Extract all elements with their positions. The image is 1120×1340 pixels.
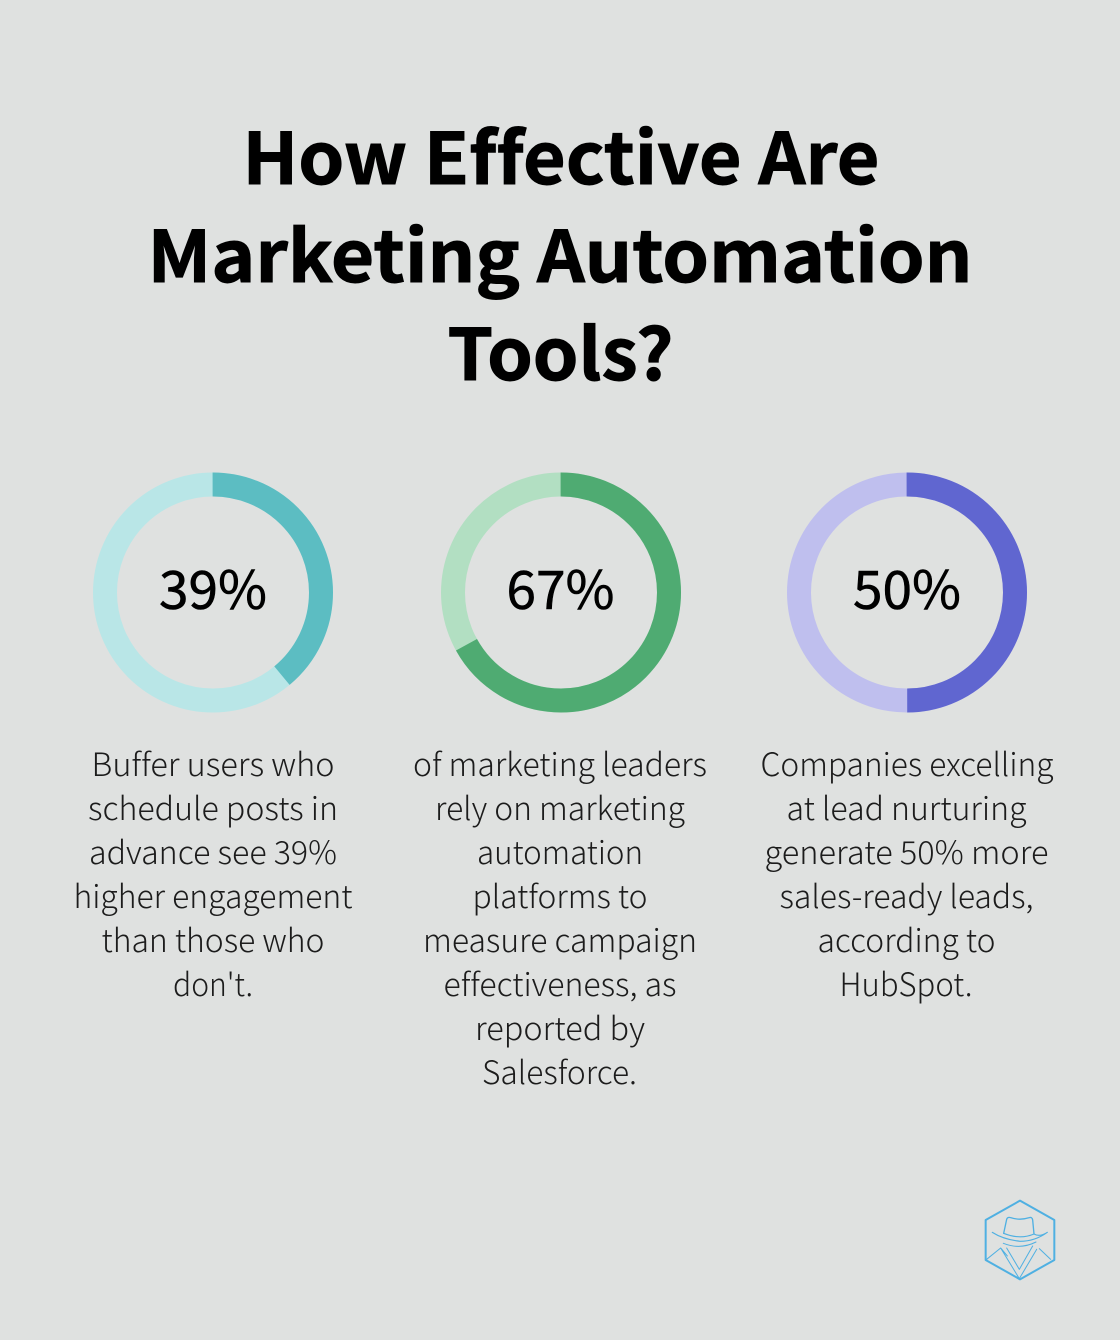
description: Salesforce: platforms to [472,872,648,918]
description: Buffer: than those who [102,916,324,962]
description: Salesforce: reported by [475,1004,645,1050]
donut chart: 39% [105,484,321,700]
description: Buffer: don't. [173,960,253,1006]
description: Buffer: higher engagement [74,872,352,918]
description: Salesforce: Salesforce. [482,1048,637,1094]
description: Buffer [74,740,352,1006]
description: Salesforce [413,740,707,1094]
description: Buffer: Buffer users who [92,740,334,786]
panel: 50% stat [760,484,1054,1006]
title [148,103,973,401]
description: HubSpot: sales-ready leads, [780,872,1034,918]
description: HubSpot: at lead nurturing [786,784,1026,830]
description: Salesforce: of marketing leaders [413,740,707,786]
panel: 39% stat [74,484,352,1006]
value: 39%: 39% [159,549,267,625]
panel: 67% stat [413,484,707,1094]
value: 67%: 67% [506,549,614,625]
donut chart: 50% [799,484,1015,700]
description: Buffer: advance see 39% [89,828,337,874]
description: Salesforce: rely on marketing [435,784,685,830]
description: HubSpot [760,740,1054,1006]
title: Tools? [448,299,674,401]
title: Marketing Automation [148,201,973,303]
description: Salesforce: measure campaign [423,916,697,962]
icon: hexagon logo with hat and coat figure [986,1201,1054,1279]
title: How Effective Are [242,103,880,205]
description: HubSpot: generate 50% more [764,828,1048,874]
description: HubSpot: according to [818,916,996,962]
description: Salesforce: automation [477,828,643,874]
description: HubSpot: HubSpot. [840,960,972,1006]
description: Salesforce: effectiveness, as [444,960,676,1006]
donut chart: 67% [453,484,669,700]
description: HubSpot: Companies excelling [760,740,1054,786]
value: 50%: 50% [853,549,961,625]
description: Buffer: schedule posts in [88,784,338,830]
